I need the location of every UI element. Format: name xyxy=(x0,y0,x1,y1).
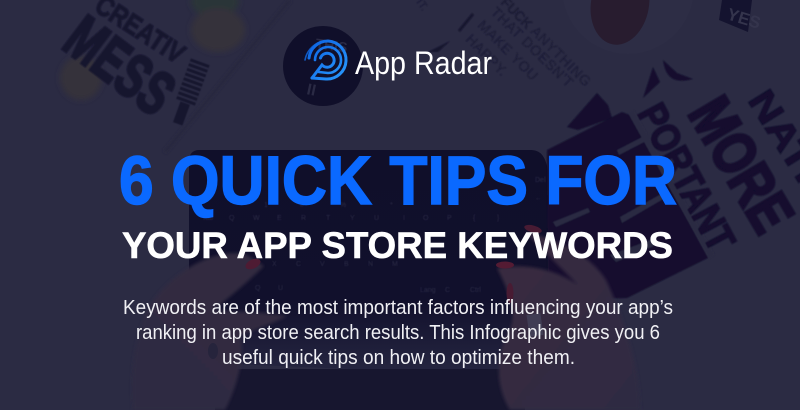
photo: note with handwritten quote: ANYTHING xyxy=(528,23,594,89)
intro paragraph: ranking in app store search results. This Infographic gives you 6 xyxy=(136,322,660,344)
keyboard key legends: # xyxy=(300,202,304,209)
keyboard key legends: M xyxy=(392,261,398,268)
logo badge: II xyxy=(305,81,317,100)
keyboard key legends: } xyxy=(497,215,500,222)
poster lettering xyxy=(52,0,191,129)
photo: coffee cup xyxy=(562,0,694,54)
keyboard key legends: W xyxy=(253,215,260,222)
icon: radar spiral xyxy=(305,41,346,79)
logo badge xyxy=(283,26,363,106)
shadow below keyboard xyxy=(215,369,525,410)
keyboard key legends: U xyxy=(374,215,379,222)
hand: right nails xyxy=(496,223,543,303)
keyboard key legends: V xyxy=(320,261,325,268)
keyboard key legends: O xyxy=(423,215,429,222)
intro paragraph: Keywords are of the most important factors influencing your app’s xyxy=(123,297,673,319)
keyboard key legends: ← xyxy=(535,195,542,202)
keyboard xyxy=(189,150,548,410)
keyboard key legends: X xyxy=(272,261,277,268)
keyboard key legends: I xyxy=(403,215,405,222)
photo: yes sticker: YES xyxy=(725,5,763,33)
keyboard key legends: P xyxy=(447,215,452,222)
title: 6 QUICK TIPS FOR xyxy=(119,142,677,219)
keyboard key legends: Lang xyxy=(420,287,436,294)
keyboard key legends: C xyxy=(296,261,301,268)
subtitle: YOUR APP STORE KEYWORDS xyxy=(122,225,673,266)
keyboard key legends xyxy=(202,177,546,294)
intro paragraph xyxy=(123,297,673,369)
photo: typographic poster xyxy=(547,60,800,300)
photo: note with handwritten quote: HAPPY. xyxy=(463,31,511,79)
photo: note with handwritten quote: MAKE YOU xyxy=(475,17,541,83)
photo: typographic poster: PORTANT xyxy=(629,97,743,258)
logo badge: THIS xyxy=(315,35,348,55)
keyboard key legends: % xyxy=(340,202,346,209)
hand: left ring xyxy=(208,343,218,359)
hand: right xyxy=(497,232,640,410)
keyboard key legends: Del xyxy=(535,177,546,184)
hand: left nail xyxy=(244,257,262,271)
keyboard key legends: T xyxy=(326,215,331,222)
keyboard key legends: Y xyxy=(350,215,355,222)
keyboard key legends: N xyxy=(368,261,373,268)
keyboard key legends: Q xyxy=(229,215,235,222)
keyboard key legends: E xyxy=(277,215,282,222)
brush xyxy=(168,58,210,127)
keyboard key legends: Ctrl xyxy=(470,287,481,294)
keyboard key legends: B xyxy=(344,261,349,268)
photo: note with handwritten quote xyxy=(414,0,594,90)
flowers xyxy=(60,0,245,100)
hand: right ring xyxy=(527,313,543,337)
keyboard key legends: U xyxy=(278,285,283,292)
photo: creative mess poster xyxy=(52,0,290,152)
photo: note with handwritten quote: THAT DOESN'T xyxy=(488,4,577,90)
logo wordmark: App Radar xyxy=(355,45,492,81)
keyboard key legends: C xyxy=(445,287,450,294)
poster lettering: MESS xyxy=(52,3,187,129)
keyboard key legends: Q xyxy=(255,285,261,292)
keyboard key legends: { xyxy=(473,215,476,222)
intro paragraph: useful quick tips on how to optimize them. xyxy=(222,347,575,369)
keyboard key legends: Tab xyxy=(202,215,213,222)
keyboard key legends: R xyxy=(301,215,306,222)
keyboard key legends: * xyxy=(390,202,393,209)
hand: left xyxy=(132,253,287,410)
keyboard key legends: 1 xyxy=(264,202,268,209)
